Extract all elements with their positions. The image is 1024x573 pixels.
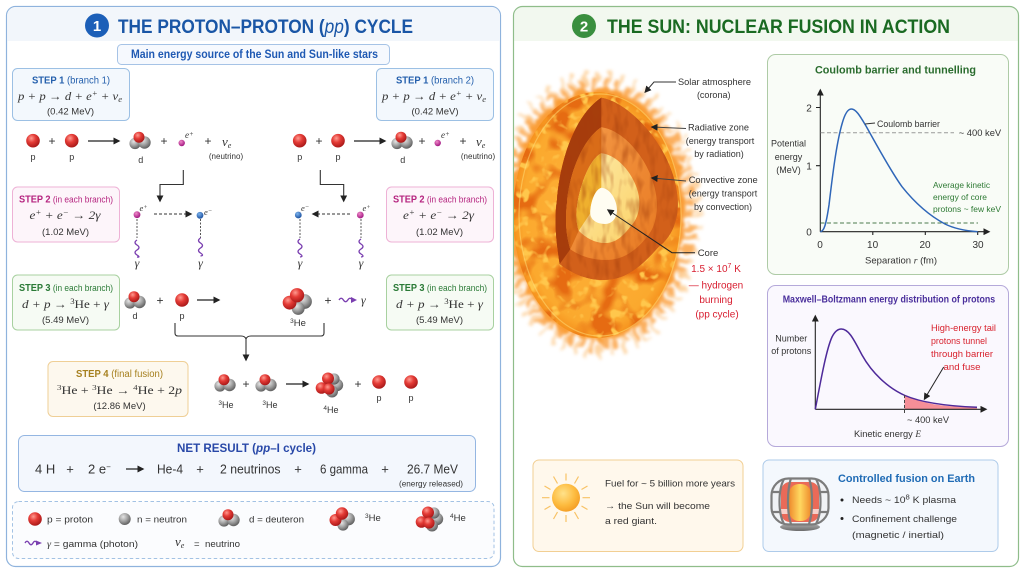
step 1 branch 2 box [376,68,494,120]
legend: proton [28,512,93,526]
legend: helium-3: He [369,513,381,524]
net result box: He-4 [157,462,183,476]
legend: deuteron: d = deuteron [249,514,304,526]
annihilation diagram left: − [208,208,212,215]
chart axis labels: 20 [919,240,931,251]
annihilation diagram right: γ [298,256,303,270]
step 3 left box: γ [104,297,109,311]
chart title: Maxwell–Boltzmann energy distribution of protons [783,294,996,306]
controlled fusion bullets: Needs ~ 10 [852,495,901,506]
step 3 left box: 3 [70,297,75,306]
legend: helium-3: 3 [365,513,369,520]
label: radiative zone: (energy transport [686,136,755,146]
reaction row: branch 2 step 1: p [297,152,302,162]
step 3 right box: (5.49 MeV) [416,315,463,326]
net result box: − [106,462,111,472]
step 3 left box: STEP 3 (in each branch) [19,282,113,294]
annihilation diagram right [295,203,371,270]
heading: proton-proton cycle: THE PROTON–PROTON (pp) CYCLE [118,17,413,38]
curve annotations: Coulomb barrier [877,119,940,130]
panel: maxwell-boltzmann chart [768,286,1008,446]
reaction row: branch 1 step 1: e [185,130,189,140]
fuel text: a red giant. [605,516,657,527]
icon: tokamak [772,478,828,531]
convective zone layer [566,127,657,260]
annihilation diagram right: e [301,203,305,213]
legend: neutron [119,513,187,526]
step 1 branch 1 box: e [118,95,122,104]
net result box: 2 neutrinos [220,462,281,476]
legend: neutrino [175,534,240,550]
icon: sun [542,474,590,522]
reaction row: step 4: 3 [262,400,266,407]
panel: fuel remaining [533,460,743,552]
step 1 branch 1 box: (0.42 MeV) [47,106,94,118]
chart axis labels: Separation r (fm) [865,256,937,266]
legend [12,502,494,558]
chart axis labels: energy [775,152,803,162]
label: radiative zone [652,123,755,159]
label: core: — hydrogen [689,280,743,292]
controlled fusion bullets: K plasma [910,495,957,506]
label: core [608,210,743,320]
heading: the sun: THE SUN: NUCLEAR FUSION IN ACTION [607,17,950,38]
legend: neutrino: = [194,539,200,550]
step 1 branch 2 box: p + p → d + e [382,89,452,103]
curve annotations: protons ~ few keV [933,204,1001,214]
legend: neutrino: e [181,541,185,550]
label: core: Core [698,248,718,259]
label: radiative zone: by radiation) [694,149,744,159]
tail annotation: and fuse [944,362,980,373]
reaction row: branch 2 step 1: e [482,141,486,150]
annihilation diagram left: + [143,204,148,211]
fuel text: Fuel for ~ 5 billion more years [605,478,735,490]
label: radiative zone: Radiative zone [688,123,749,134]
annihilation diagram left: e [204,207,208,217]
reaction row: step 3: He [294,318,306,329]
step 3 right box: He + [449,297,478,311]
reaction row: step 4 [214,372,418,415]
reaction row: branch 1 step 1: + [204,134,212,148]
step 1 branch 1 box: STEP 1 (branch 1) [32,76,110,86]
chart axis labels: Potential [771,138,806,148]
chart axis labels: (MeV) [776,165,801,175]
label: convective zone [652,175,758,212]
net result box: 2 e [88,462,106,476]
step 4 box: 3 [57,383,62,392]
controlled fusion title: Controlled fusion on Earth [838,473,975,485]
chart axis labels: 0 [817,240,823,251]
step 4 box: p [174,385,182,397]
inner zone layer [576,153,639,243]
subtitle [118,44,390,64]
reaction row: branch 1 step 1: e [228,141,232,150]
controlled fusion bullets [840,494,957,541]
annihilation diagram right: e [362,203,366,213]
curve annotations: Average kinetic [933,180,991,190]
step 3 right box: STEP 3 (in each branch) [393,282,487,294]
step 3 right box: d + p → [396,297,440,311]
section number 2 [572,14,596,38]
label: core: burning [699,295,733,306]
step 2 left box [12,187,120,242]
step 2 left box: STEP 2 (in each branch) [19,194,113,206]
step 3 left box: He + [75,297,104,311]
annihilation diagram left [134,203,212,270]
legend: gamma: γ = gamma (photon) [47,539,138,550]
step 2 left box: e [30,208,35,222]
chart axis labels: 2 [806,104,812,114]
reaction row: step 3: + [156,294,164,308]
reaction row: step 3: γ [361,293,366,307]
step 1 branch 1 box: p + p → d + e [18,89,88,103]
reaction row: branch 1 step 1: + [189,130,194,138]
chart axis labels: 10 [867,240,879,251]
step 3 left box [12,275,120,330]
step 1 branch 2 box: + [456,89,462,98]
step 4 box [48,362,188,416]
controlled fusion bullets: 8 [905,494,910,502]
reaction row: branch 2 step 1: e [441,130,445,140]
bracket joining both branches [175,323,324,360]
curve annotations [865,119,1002,214]
chart axes [816,90,989,235]
label: core: 7 [728,263,732,270]
chart axis labels: 30 [972,240,984,251]
controlled fusion bullets: (magnetic / inertial) [852,530,944,541]
step 2 right box [386,187,494,242]
step 2 left box: + e [41,208,64,222]
legend: neutrino: ν [175,534,181,549]
reaction row: branch 1 step 1: ν [222,134,228,149]
net result box: NET RESULT (pp–I cycle) [177,443,316,455]
step 2 right box: e [403,208,408,222]
reaction row: branch 2 step 1: + [459,134,467,148]
sun cutaway illustration [500,78,694,350]
label: core: (pp cycle) [695,310,739,320]
panel: the sun [500,6,1018,566]
reaction row: step 4: He [266,400,278,410]
reaction row: step 3: d [132,311,138,321]
step 2 right box: → 2γ [442,208,474,222]
step 3 right box [386,275,494,330]
label: convective zone: by convection) [694,202,752,212]
chart axes [815,316,986,409]
reaction row: branch 1 step 1: (neutrino) [209,152,243,161]
legend: helium-3 [330,507,381,531]
reaction row: step 4: He [327,405,339,415]
controlled fusion bullets: Confinement challenge [852,514,957,525]
reaction row: branch 1 step 1: p [30,152,36,162]
reaction row: step 4: He [222,400,234,410]
legend: neutrino: neutrino [205,539,240,550]
step 1 branch 2 box: + ν [462,89,483,103]
reaction row: branch 2 step 1 [293,130,495,165]
axis labels: of protons [771,346,812,356]
label: convective zone: Convective zone [689,175,758,186]
axis labels: Kinetic energy E [854,429,921,440]
annihilation diagram right: γ [359,256,364,270]
legend: helium-4: He [454,513,466,524]
chart axis labels: 1 [806,162,812,172]
annihilation diagram left: e [140,203,143,213]
net result box: + [196,462,204,476]
tail annotation: through barrier [931,349,993,360]
panel: coulomb barrier chart [768,54,1008,274]
step 2 right box: (1.02 MeV) [416,227,463,238]
step 2 left box: + [35,208,41,217]
chart axis labels [771,104,984,266]
label: convective zone: (energy transport [689,188,758,198]
reaction row: step 3: p [179,311,185,321]
step 4 box: He + 2 [138,385,175,397]
reaction row: branch 2 step 1: ν [476,134,482,149]
axis labels: ~ 400 keV [907,415,950,426]
reaction row: step 4: 4 [323,405,327,412]
step 1 branch 1 box [12,68,130,120]
legend: helium-4 [416,506,466,532]
reaction row: branch 2 step 1: (neutrino) [461,152,495,161]
step 4 box: (12.86 MeV) [93,401,146,412]
chart axis labels: 0 [806,228,812,238]
label: solar atmosphere [645,77,751,100]
net result box: 26.7 MeV [407,462,458,476]
core [590,188,617,224]
net result box: + [294,462,302,476]
annihilation diagram left: γ [135,256,140,270]
step 2 right box: STEP 2 (in each branch) [393,194,487,206]
arrow: positron to step 2, left [160,170,183,201]
reaction row: step 4: p [376,393,382,403]
annihilation diagram left: γ [198,256,203,270]
annihilation diagram right: + [366,204,371,211]
reaction row: branch 1 step 1 [26,130,243,165]
step 1 branch 2 box: STEP 1 (branch 2) [396,76,474,86]
annihilation diagram right: − [305,204,309,211]
step 1 branch 2 box: (0.42 MeV) [412,106,458,118]
legend: neutron: n = neutron [137,514,187,526]
reaction row: step 4: p [408,393,414,403]
fuel text: → the Sun will become [605,501,710,512]
legend: helium-4: 4 [450,513,454,520]
reaction row: branch 1 step 1: + [160,134,168,148]
tail annotation [924,323,996,399]
reaction row: step 3: + [324,294,332,308]
section number 1: 1 [93,18,101,35]
reaction row: branch 1 step 1: p [69,152,74,162]
subtitle: Main energy source of the Sun and Sun-like stars [131,49,378,61]
reaction row: branch 2 step 1: d [400,155,405,165]
reaction row: step 4: + [354,377,362,391]
step 4 box: He → [97,385,133,397]
label: core: 1.5 × 10 [691,264,728,275]
net result box [18,436,476,492]
net result box: (energy released) [399,480,463,488]
step 1 branch 1 box: + ν [98,89,119,103]
step 3 left box: d + p → [22,297,66,311]
section number 1 [85,14,109,38]
reference lines [820,133,978,223]
axis labels [771,334,950,440]
reaction row: branch 2 step 1: p [335,152,341,162]
legend: deuteron [218,509,304,527]
step 4 box: STEP 4 (final fusion) [76,369,163,380]
reaction row: branch 2 step 1: + [418,134,426,148]
reaction row: branch 1 step 1: d [138,155,143,165]
maxwell-boltzmann curve [815,329,977,409]
arrow: positron to step 2, right [320,170,344,201]
label: solar atmosphere: (corona) [697,90,730,100]
step 4 box: 3 [92,383,97,392]
step 3 left box: (5.49 MeV) [42,315,89,326]
step 2 right box: + e [415,208,437,222]
threshold marker [904,395,906,415]
chart title: Coulomb barrier and tunnelling [815,64,976,76]
reaction row: step 3: 3 [290,318,294,325]
step 4 box: He + [61,385,92,397]
step 4 box: 4 [133,383,138,392]
step 2 left box: → 2γ [69,208,101,222]
radiative zone layer [556,98,678,280]
step 2 right box: + [409,208,415,217]
tail annotation: protons tunnel [931,336,987,347]
fuel text [605,478,735,527]
reaction row: branch 1 step 1: + [48,134,56,148]
step 1 branch 1 box: + [92,89,98,98]
axis labels: Number [775,334,807,344]
step 2 left box: − [63,208,69,217]
net result box: 4 H [35,462,55,476]
step 3 right box: γ [478,297,483,311]
section number 2: 2 [580,18,588,36]
step 2 left box: (1.02 MeV) [42,227,89,238]
reaction row: step 3 [124,288,366,329]
net result box: + [66,462,74,476]
reaction row: step 4: + [242,377,250,391]
tail annotation: High-energy tail [931,323,996,334]
coulomb barrier curve [820,109,978,232]
panel: proton-proton cycle [6,6,500,566]
legend: proton: p = proton [47,514,93,526]
step 2 right box: − [436,208,442,217]
reaction row: step 4: 3 [218,400,222,407]
curve annotations: ~ 400 keV [959,128,1002,139]
net result box: 6 gamma [320,462,369,476]
net result box: + [381,462,389,476]
label: core: K [731,264,741,275]
step 3 right box: 3 [444,297,449,306]
panel: controlled fusion on earth [763,460,998,552]
step 1 branch 2 box: e [482,95,486,104]
label: solar atmosphere: Solar atmosphere [678,77,751,88]
reaction row: branch 2 step 1: + [315,134,323,148]
curve annotations: energy of core [933,192,987,202]
reaction row: branch 2 step 1: + [445,130,450,138]
high-energy tail shading [904,396,977,409]
